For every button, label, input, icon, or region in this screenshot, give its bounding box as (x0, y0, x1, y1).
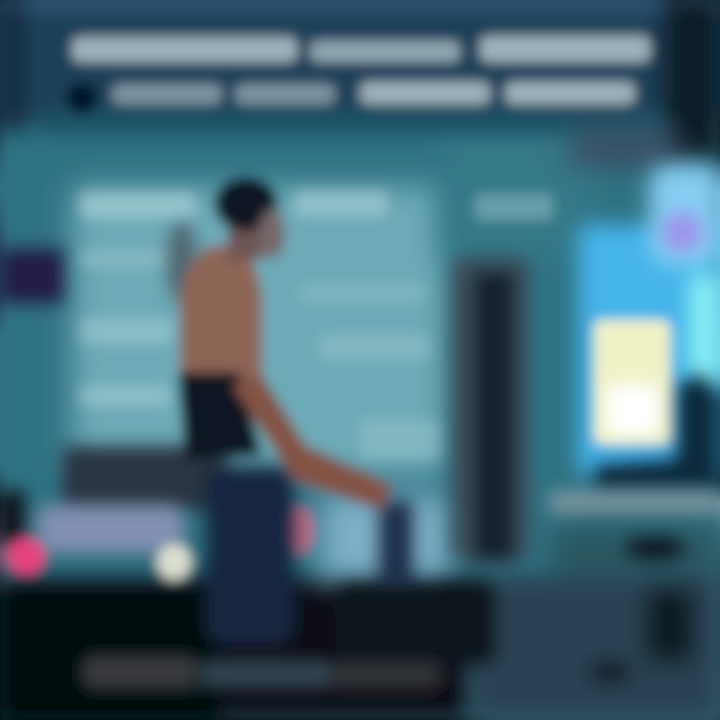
tank top (178, 372, 262, 460)
left purple sign (0, 248, 65, 304)
equipment near hands (287, 500, 495, 665)
desk (550, 492, 720, 585)
dark spot beside title (66, 82, 98, 114)
person (166, 177, 392, 645)
neck (228, 225, 262, 260)
legs (205, 465, 295, 645)
monitor (578, 165, 720, 490)
arm (232, 375, 392, 510)
torso (180, 245, 262, 385)
head (214, 177, 278, 231)
treadmill (0, 445, 227, 720)
shoulder shadow (166, 220, 198, 304)
footer text (82, 655, 442, 689)
floor (0, 495, 720, 720)
wall text blocks (80, 190, 553, 460)
title (72, 36, 650, 104)
punching bag (450, 256, 530, 561)
